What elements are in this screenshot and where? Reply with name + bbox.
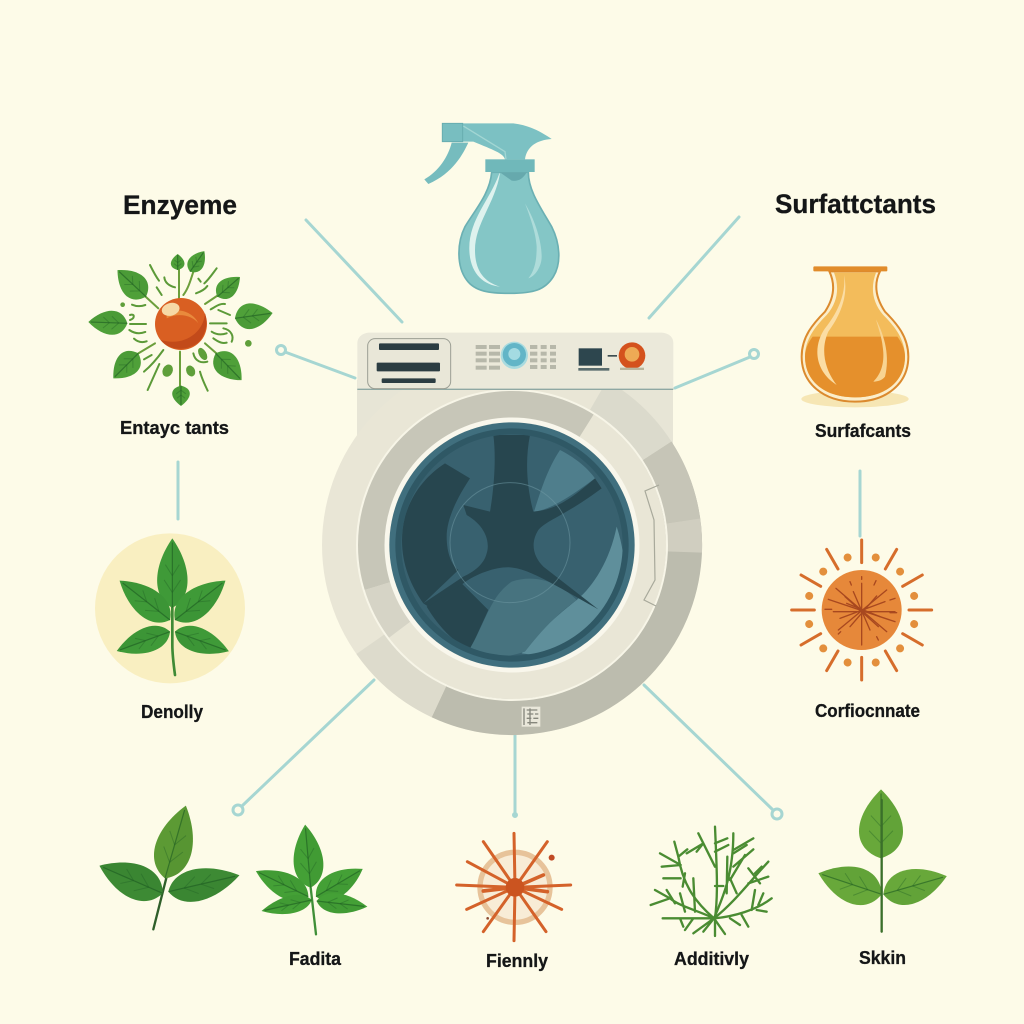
control panel xyxy=(357,333,673,389)
label: Fiennly: Fiennly xyxy=(486,951,548,971)
icon: feathery green plant xyxy=(651,827,772,936)
detergent drawer xyxy=(368,339,451,389)
door ring xyxy=(322,355,702,735)
button grid xyxy=(476,345,556,370)
icon: spray bottle xyxy=(424,123,559,293)
label: Fadita: Fadita xyxy=(289,949,342,969)
label: Surfafcants: Surfafcants xyxy=(815,421,911,441)
icon: three-leaf sprig xyxy=(93,801,243,929)
icon: enzyme sphere with leaves xyxy=(88,247,274,406)
blue dial xyxy=(501,342,528,369)
washing machine xyxy=(322,333,702,735)
porthole glass xyxy=(389,422,635,668)
heading: Surfattctants: Surfattctants xyxy=(775,189,936,219)
label: Skkin: Skkin xyxy=(859,948,906,968)
label: Corfiocnnate: Corfiocnnate xyxy=(815,701,920,721)
display and orange button xyxy=(578,342,645,371)
machine body xyxy=(357,380,673,460)
label: Entayc tants: Entayc tants xyxy=(120,418,229,438)
icon: orange vase xyxy=(801,266,909,407)
door handle xyxy=(644,485,659,606)
label: Additivly: Additivly xyxy=(674,949,749,969)
icon: five-leaf sprig xyxy=(250,823,369,934)
barcode tag xyxy=(522,707,540,727)
icon: green three-leaf plant xyxy=(813,789,952,932)
icon: orange fibre burst xyxy=(457,833,571,941)
icon: orange sun xyxy=(792,540,932,680)
label: Denolly: Denolly xyxy=(141,702,203,722)
heading: Enzyeme: Enzyeme xyxy=(123,190,237,220)
connector lines xyxy=(178,217,860,819)
icon: leaf in yellow circle xyxy=(95,533,245,683)
